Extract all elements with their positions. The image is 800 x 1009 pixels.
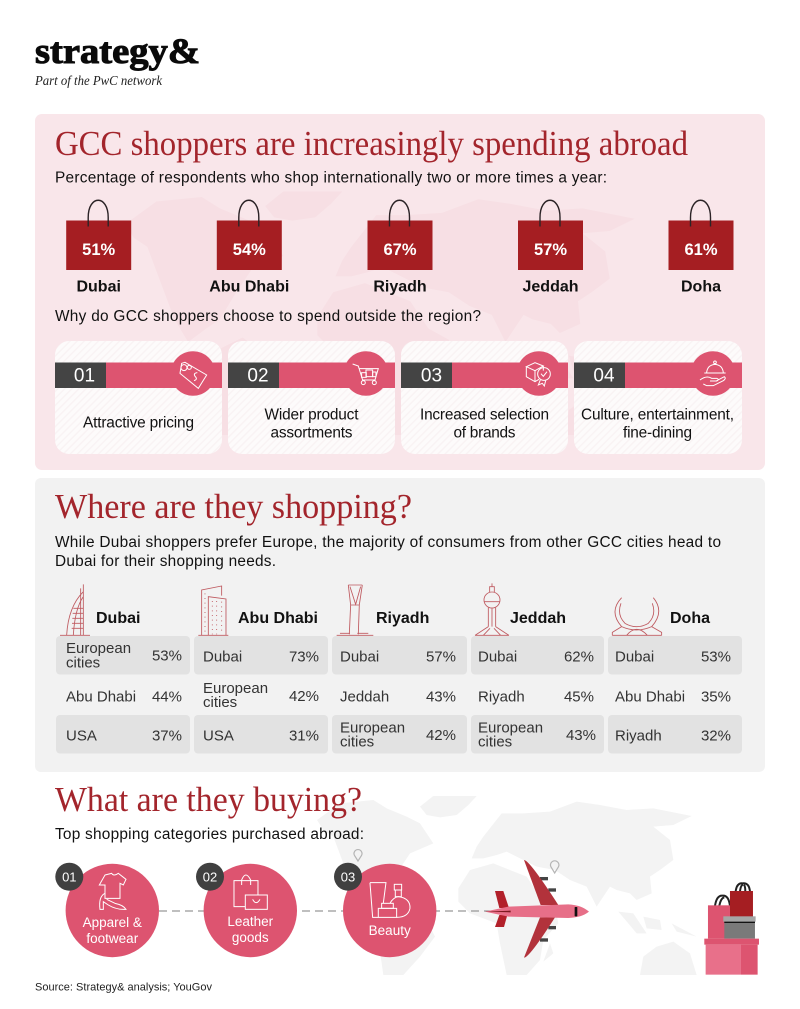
column: Abu Dhabi: Dubai [203, 648, 242, 666]
icon: cosmetics [370, 883, 410, 917]
icon: shirt and heel [99, 873, 126, 909]
column: Doha: Dubai [615, 648, 654, 666]
category: apparel and footwear: footwear [86, 931, 139, 946]
column: Abu Dhabi [198, 586, 319, 744]
icon: shopping bags [234, 875, 267, 909]
column: Abu Dhabi: 31% [289, 728, 319, 744]
card: culture and dining: 04 [593, 366, 615, 386]
subheading: respondents: Percentage of respondents who shop internationally two or more times a year: [55, 170, 607, 186]
column: Doha: 35% [701, 688, 731, 706]
bag: Doha 61% [668, 200, 734, 296]
column: Jeddah: cities [478, 734, 512, 751]
heading: spending abroad: GCC shoppers are increasingly spending abroad [55, 125, 688, 163]
card: selection of brands: 03 [421, 366, 442, 386]
icon: price tag [180, 362, 207, 388]
column: Jeddah: Jeddah [510, 610, 566, 627]
intro text [55, 534, 721, 570]
column: Riyadh: Riyadh [376, 610, 429, 627]
icon: cloche on hand [700, 361, 726, 386]
icon: airplane [485, 860, 589, 958]
bag: Dubai 51%: 51% [82, 241, 116, 259]
panel: spending abroad [35, 114, 765, 470]
column: Abu Dhabi: 73% [289, 648, 319, 666]
bag: Dubai 51%: Dubai [76, 278, 121, 296]
table rows [56, 636, 742, 754]
icon: cart [353, 364, 378, 385]
column: Riyadh: European [340, 720, 405, 737]
heading: what are they buying: What are they buying? [55, 781, 362, 819]
category: apparel and footwear [55, 863, 159, 957]
column: Riyadh: 43% [426, 688, 456, 706]
column: Jeddah: 62% [564, 648, 594, 666]
column: Riyadh: cities [340, 734, 374, 751]
subheading: why abroad: Why do GCC shoppers choose to spend outside the region? [55, 308, 481, 325]
category: leather goods: Leather [227, 914, 274, 929]
icon: tower [475, 583, 509, 635]
column: Doha: 53% [701, 648, 731, 666]
icon: Kingdom Centre [337, 585, 373, 635]
icon: towers [198, 586, 228, 635]
category: beauty: 03 [341, 870, 355, 884]
column: Jeddah [475, 583, 596, 751]
column: Abu Dhabi: Abu Dhabi [238, 610, 318, 627]
bag: Abu Dhabi 54%: Abu Dhabi [209, 278, 289, 296]
category: leather goods: goods [232, 930, 269, 945]
bag: Jeddah 57% [518, 200, 583, 296]
icon: box and badge [526, 363, 550, 386]
card: attractive pricing: Attractive pricing [83, 415, 194, 432]
card: attractive pricing: 01 [74, 366, 95, 386]
intro text: Dubai for their shopping needs. [55, 553, 276, 570]
dashed route [159, 910, 490, 912]
column: Dubai: 44% [152, 688, 182, 706]
column: Doha: Doha [670, 610, 710, 627]
category: apparel and footwear: Apparel & [83, 915, 142, 930]
column: Riyadh [337, 585, 456, 751]
column: Dubai: Dubai [96, 610, 140, 627]
logo [34, 31, 200, 89]
column: Riyadh: Dubai [340, 648, 379, 666]
card: wider assortments [228, 341, 395, 454]
column: Doha: Riyadh [615, 728, 662, 744]
column: Riyadh: Jeddah [340, 688, 389, 706]
source: Source: Strategy& analysis; YouGov [35, 982, 212, 994]
column: Riyadh: 42% [426, 727, 456, 744]
world map: buying section [317, 796, 697, 975]
bag: Riyadh 67%: 67% [383, 241, 417, 259]
column: Dubai: Abu Dhabi [66, 688, 136, 706]
column: Abu Dhabi: cities [203, 694, 237, 711]
category: leather goods: 02 [203, 870, 217, 884]
column: Jeddah: European [478, 720, 543, 737]
column: Riyadh: 57% [426, 648, 456, 666]
card: culture and dining [574, 341, 742, 454]
column: Dubai [60, 584, 182, 744]
column: Abu Dhabi: USA [203, 728, 234, 744]
icon: location pins [354, 850, 559, 873]
panel: where are they shopping [35, 478, 765, 772]
intro text: While Dubai shoppers prefer Europe, the majority of consumers from other GCC cities head to [55, 534, 721, 551]
bag: Jeddah 57%: 57% [534, 241, 567, 259]
column: Dubai: cities [66, 654, 100, 671]
column: Dubai: 37% [152, 728, 182, 744]
bag: Riyadh 67% [368, 200, 432, 296]
bag: Riyadh 67%: Riyadh [373, 278, 427, 296]
bag: Jeddah 57%: Jeddah [522, 278, 579, 296]
bag: Doha 61%: 61% [684, 241, 718, 259]
category: leather goods [196, 863, 297, 957]
card: wider assortments: assortments [270, 424, 353, 441]
logo: strategy& [35, 31, 200, 71]
icon: Burj Al Arab [60, 584, 90, 635]
column: Dubai: USA [66, 728, 97, 744]
card: selection of brands [401, 341, 568, 454]
icon: crescent arch [612, 598, 662, 635]
bag: Abu Dhabi 54% [209, 200, 289, 296]
column: Jeddah: Riyadh [478, 688, 525, 706]
column: Jeddah: 43% [566, 727, 596, 744]
card: wider assortments: 02 [247, 366, 269, 386]
card: culture and dining: Culture, entertainment, [581, 406, 734, 423]
column: Doha [612, 598, 731, 744]
column: Abu Dhabi: 42% [289, 688, 319, 705]
heading: where: Where are they shopping? [55, 488, 412, 526]
column: Doha: Abu Dhabi [615, 688, 685, 706]
card: culture and dining: fine-dining [623, 424, 692, 441]
category: apparel and footwear: 01 [62, 870, 77, 884]
card: wider assortments: Wider product [264, 406, 359, 423]
bag: Doha 61%: Doha [681, 278, 721, 296]
category: beauty: Beauty [369, 923, 411, 938]
column: Doha: 32% [701, 728, 731, 744]
column: Abu Dhabi: European [203, 680, 268, 697]
card: selection of brands: of brands [454, 424, 516, 441]
category: beauty [334, 863, 436, 957]
card: attractive pricing [55, 341, 222, 454]
icon: stacked shopping bags and boxes [704, 883, 759, 975]
bag: Abu Dhabi 54%: 54% [233, 241, 266, 259]
column: Jeddah: 45% [564, 688, 594, 706]
column: Dubai: European [66, 640, 131, 657]
card: selection of brands: Increased selection [420, 406, 549, 423]
column: Jeddah: Dubai [478, 648, 517, 666]
column: Dubai: 53% [152, 648, 182, 664]
bag: Dubai 51% [66, 200, 131, 296]
subheading: categories: Top shopping categories purchased abroad: [55, 826, 364, 843]
logo: Part of the PwC network [34, 74, 163, 89]
